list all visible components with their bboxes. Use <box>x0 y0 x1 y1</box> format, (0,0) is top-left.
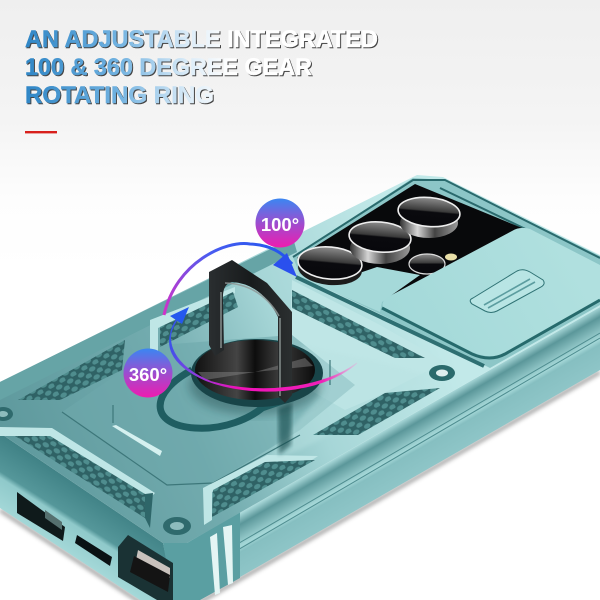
lens 4 small <box>409 254 445 274</box>
rotation arrow 360 degrees <box>170 307 357 391</box>
grip panel bottom left end wall <box>145 493 153 528</box>
corner stripes <box>210 525 233 595</box>
camera flash <box>445 254 457 260</box>
case rim below slider <box>296 277 484 366</box>
grip frame bevels <box>0 287 318 525</box>
badge 100 degrees: 100° <box>261 214 299 235</box>
outer ring seat <box>160 370 300 428</box>
disk collar <box>191 339 323 407</box>
case left side wall <box>0 433 175 600</box>
black spun disk <box>195 340 315 400</box>
screw left <box>0 407 13 421</box>
case right side wall <box>175 307 600 600</box>
badge 360 degrees: 360° <box>129 364 167 385</box>
camera island rim <box>293 178 600 368</box>
badge 100 degrees <box>256 198 304 248</box>
slider grip <box>470 270 544 312</box>
side wall grooves <box>222 333 600 558</box>
raised plate <box>62 335 355 485</box>
red accent line <box>25 131 57 133</box>
grip panel bottom centre <box>212 460 315 517</box>
plate outline <box>62 360 330 485</box>
case top surface <box>0 175 600 543</box>
reflection shade under ring <box>278 402 292 455</box>
grip panel left <box>18 340 125 400</box>
title: ROTATING RING <box>25 82 214 109</box>
port middle <box>75 535 112 566</box>
folding ring arch <box>209 260 292 403</box>
title: 100 & 360 DEGREE GEAR <box>25 54 312 81</box>
slider lower rim <box>382 300 600 358</box>
grip panel bottom left <box>15 436 145 518</box>
lens 1 <box>297 244 363 288</box>
lens 2 <box>348 219 412 264</box>
lens 3 <box>397 195 461 238</box>
disk spin highlights <box>198 358 313 380</box>
port large <box>118 535 173 600</box>
grip panel upper left <box>160 292 238 347</box>
panel under lenses <box>297 267 420 312</box>
grip panel upper right <box>292 290 425 358</box>
port left <box>17 492 65 541</box>
top edge bevel <box>0 238 297 400</box>
ring stand <box>191 260 323 407</box>
camera slider <box>382 228 600 356</box>
plate right side highlight <box>260 345 437 465</box>
title <box>25 26 378 109</box>
camera island rim lines <box>293 180 600 258</box>
screw bottom <box>163 517 191 535</box>
case corner bumper <box>163 512 240 600</box>
phone case <box>0 175 600 600</box>
plate highlight bevel <box>112 425 162 456</box>
arch rim shine <box>221 283 280 396</box>
badge 360 degrees <box>124 348 172 398</box>
light bevel right of ring <box>290 280 445 410</box>
camera island interior <box>297 184 522 300</box>
rotation arrow 100 degrees <box>164 244 297 315</box>
screw right <box>429 365 455 381</box>
title: AN ADJUSTABLE INTEGRATED <box>25 26 378 53</box>
ground shadow <box>0 372 600 600</box>
ring base shadow <box>189 355 321 415</box>
grip panel bottom right <box>313 388 440 435</box>
